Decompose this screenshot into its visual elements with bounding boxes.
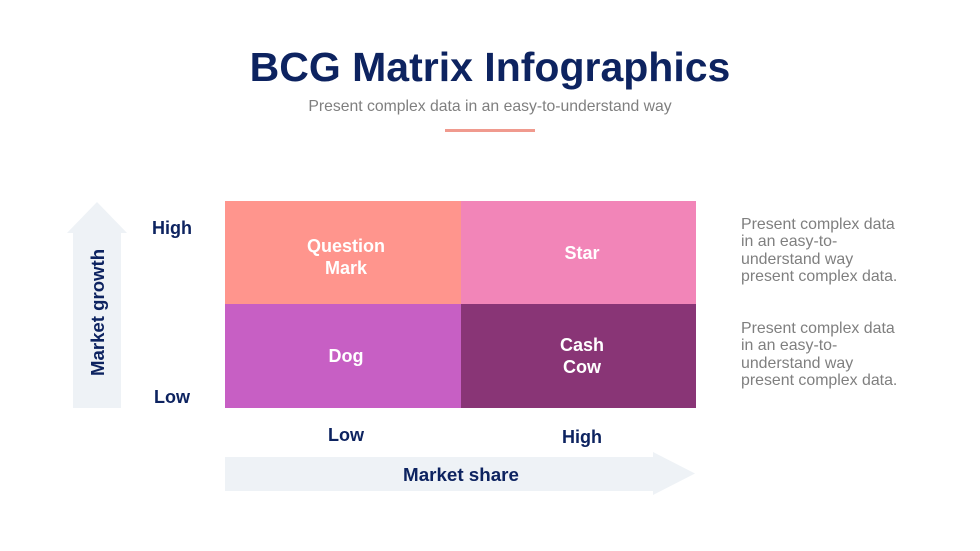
quadrant: cash cow (461, 304, 696, 408)
quadrant: star (461, 201, 696, 304)
description: bottom: present complex data. (741, 372, 897, 389)
description: top: present complex data. (741, 268, 897, 285)
description: bottom: Present complex data (741, 320, 895, 337)
description: top: understand way (741, 251, 853, 268)
description: bottom (741, 320, 897, 389)
label: low share: Low (328, 425, 364, 445)
subtitle: Present complex data in an easy-to-understand way (308, 98, 672, 115)
description: top: Present complex data (741, 216, 895, 233)
quadrant: question mark (225, 201, 461, 304)
title underline (445, 129, 535, 132)
quadrant: cash cow: Cash (560, 335, 604, 355)
quadrant: dog (225, 304, 461, 408)
title: BCG Matrix Infographics (250, 44, 730, 90)
quadrant: question mark: Mark (325, 258, 367, 278)
matrix (225, 201, 696, 408)
quadrant: cash cow: Cow (563, 357, 601, 377)
quadrant: star: Star (564, 243, 600, 263)
axis label: market share: Market share (403, 464, 519, 485)
description: bottom: understand way (741, 355, 853, 372)
quadrant: question mark: Question (307, 236, 385, 256)
description: top: in an easy-to- (741, 233, 837, 250)
quadrant: dog: Dog (328, 346, 364, 366)
arrow: market growth (67, 202, 127, 408)
arrow: market share (225, 452, 694, 495)
description: bottom: in an easy-to- (741, 337, 837, 354)
label: high growth: High (152, 218, 192, 238)
axis label: market growth: Market growth (87, 249, 108, 376)
description: top (741, 216, 897, 285)
label: low growth: Low (154, 387, 190, 407)
label: high share: High (562, 427, 602, 447)
